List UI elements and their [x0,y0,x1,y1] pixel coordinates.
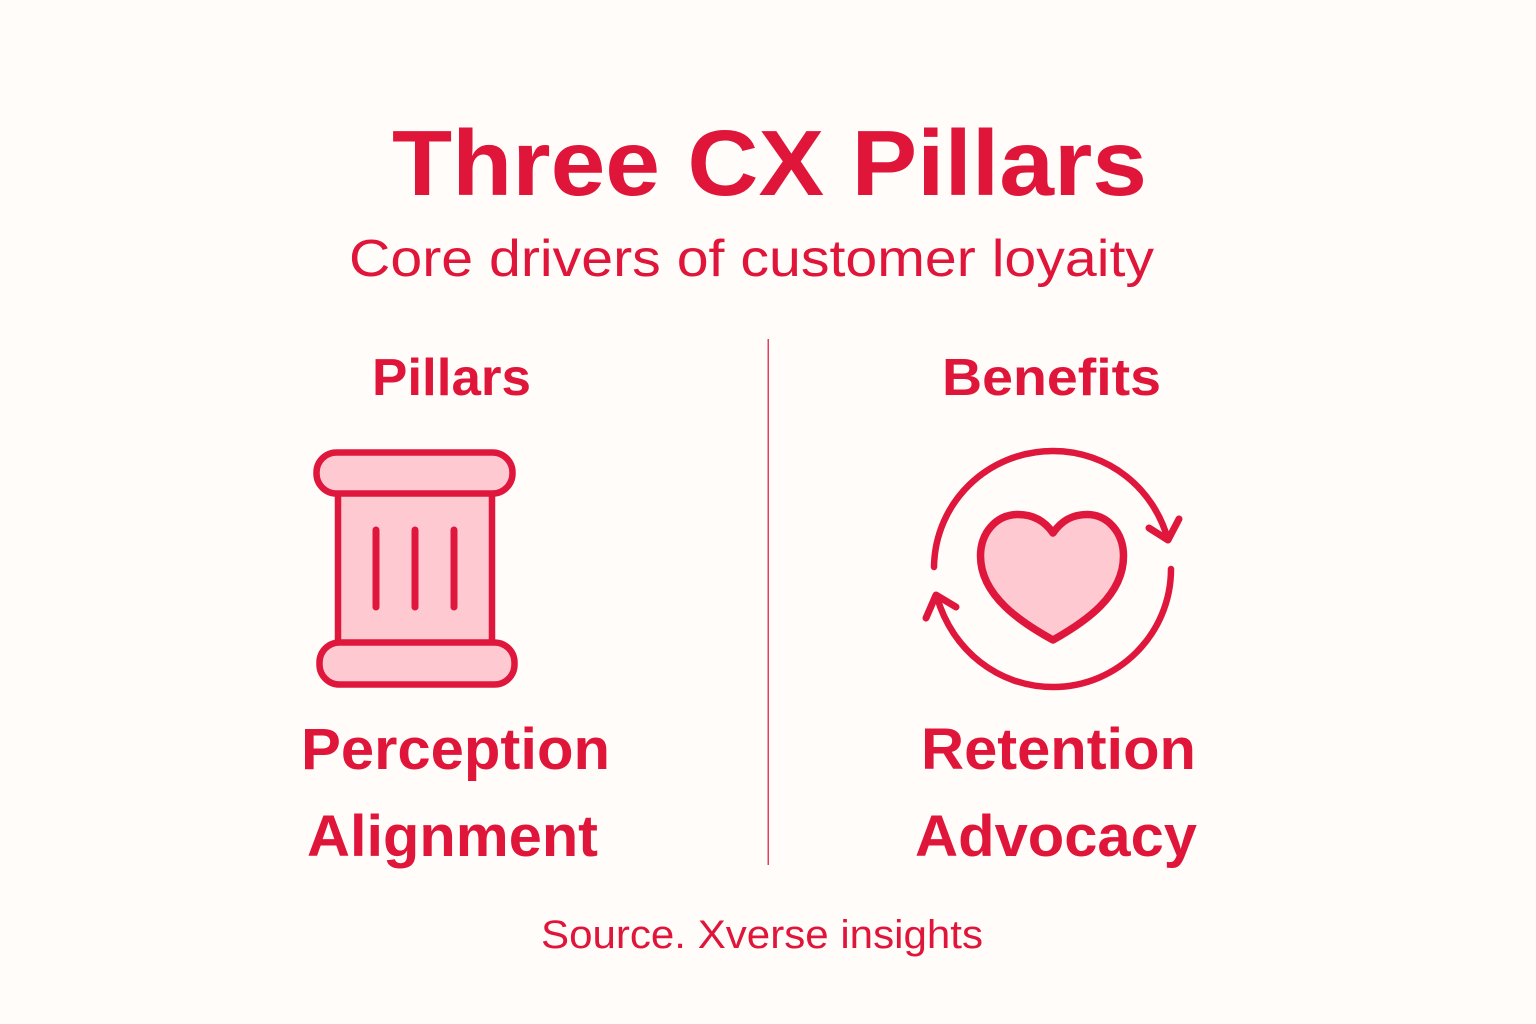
heading: Benefits: Benefits [942,349,1161,407]
lower arrowhead [926,595,956,618]
label: Retention: Retention [921,717,1196,782]
label: Alignment: Alignment [307,804,598,869]
icon: pillar column [316,452,514,684]
source note: Source. Xverse insights [541,913,983,957]
heading: Pillars: Pillars [372,349,531,407]
subtitle: Core drivers of customer loyaity [349,230,1154,288]
title: Three CX Pillars [392,111,1147,215]
label: Advocacy: Advocacy [915,804,1197,869]
upper arrowhead [1149,519,1179,540]
upper arc arrow [934,451,1168,567]
icon: heart with circular arrows [926,451,1179,687]
center divider [768,339,769,865]
heart [980,514,1124,640]
label: Perception: Perception [301,717,610,782]
lower arc arrow [937,569,1171,687]
